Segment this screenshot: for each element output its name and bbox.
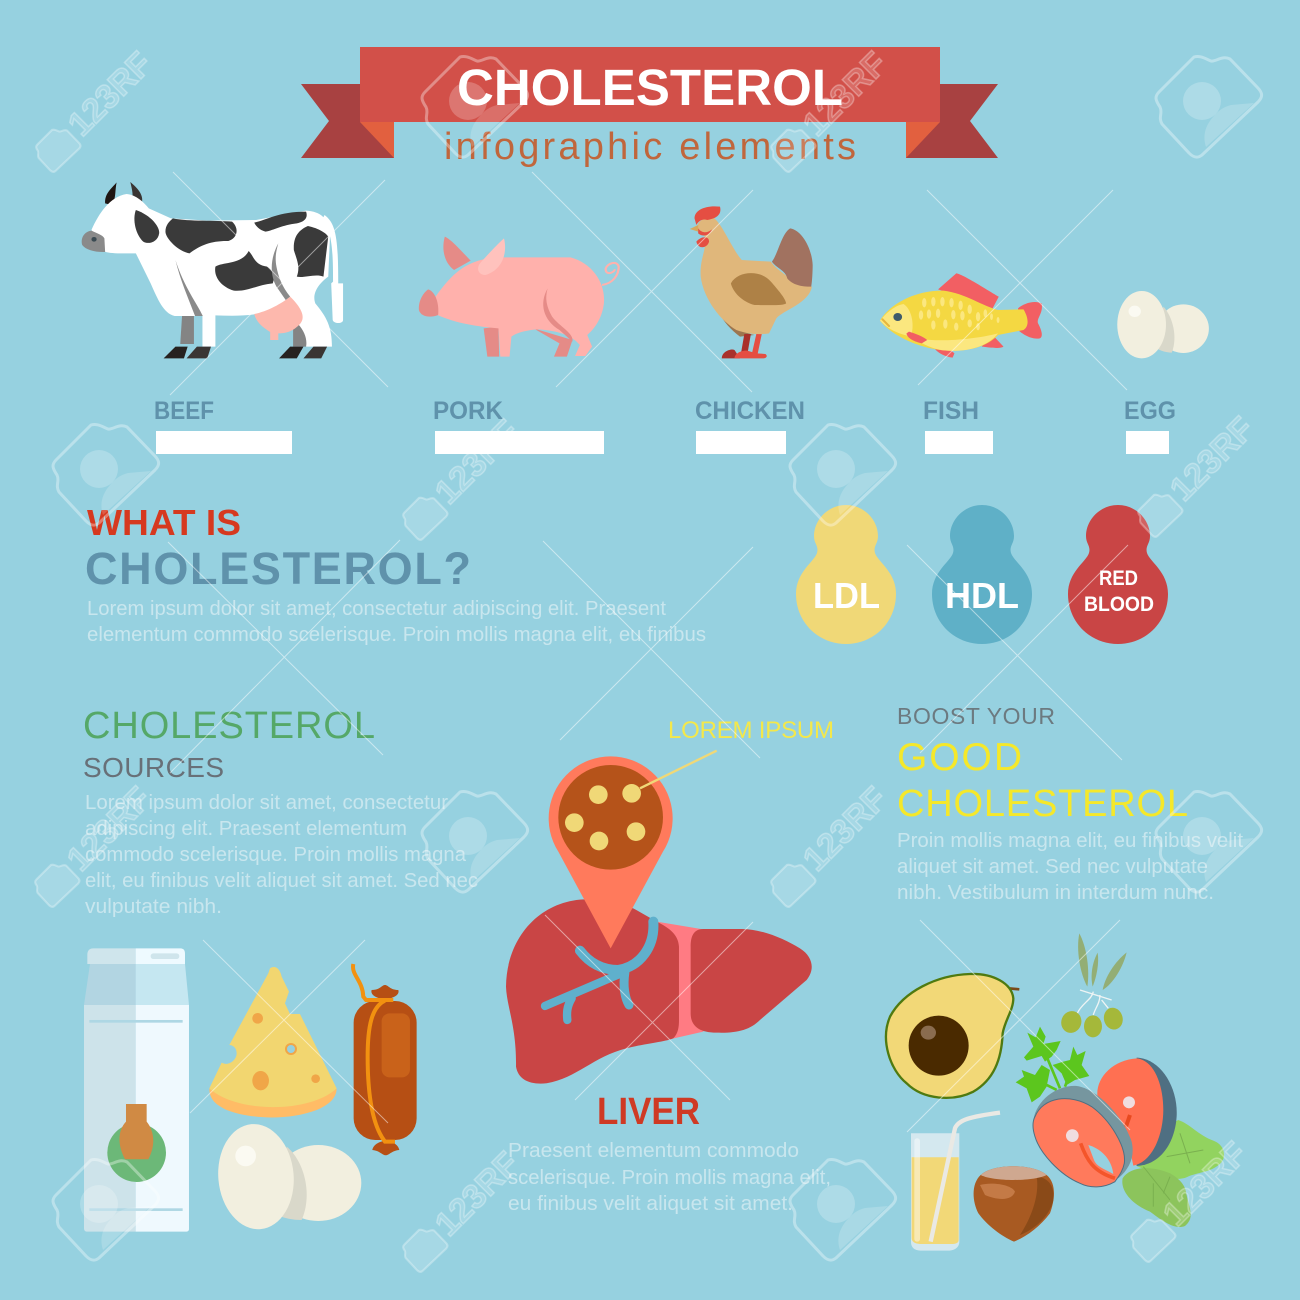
label: egg	[1124, 397, 1176, 454]
text block: sources: Lorem ipsum dolor sit amet, consectetur	[85, 791, 448, 814]
watermark: 123RF logos: 123RF	[796, 45, 895, 144]
icon: salmon steaks	[1033, 1058, 1177, 1187]
icon: map pin	[549, 751, 717, 948]
icon: cheese	[209, 967, 337, 1117]
icon: sausage	[353, 964, 417, 1155]
icon: avocado	[886, 974, 1019, 1098]
text block: good cholesterol: Proin mollis magna elit, eu finibus velit	[897, 829, 1243, 852]
watermark: 123RF logos: 123RF	[796, 780, 895, 879]
subtitle: infographic elements	[444, 126, 856, 168]
label: fish	[923, 397, 993, 454]
icon: pig	[419, 237, 619, 357]
watermark: 123RF logos: 123RF	[1163, 410, 1262, 509]
label: chicken	[695, 397, 805, 454]
icon: hazelnut	[974, 1166, 1054, 1242]
title ribbon	[301, 47, 998, 158]
heading: cholesterol sources: CHOLESTEROL	[83, 705, 375, 747]
label: chicken: CHICKEN	[695, 397, 805, 425]
label: beef	[154, 397, 292, 454]
callout: lorem ipsum: LOREM IPSUM	[668, 717, 834, 744]
drop: red blood	[1068, 505, 1168, 644]
heading: what is cholesterol: CHOLESTEROL?	[85, 543, 471, 594]
heading: cholesterol sources	[83, 705, 375, 783]
text block: sources: vulputate nibh.	[85, 895, 222, 918]
icon: lettuce	[1122, 1120, 1224, 1227]
text block: sources: adipiscing elit. Praesent elementum	[85, 817, 407, 840]
label: egg: EGG	[1124, 397, 1176, 425]
heading: what is cholesterol: WHAT IS	[87, 502, 241, 543]
text block: good cholesterol: aliquet sit amet. Sed nec vulputate	[897, 855, 1208, 878]
icon: chicken	[690, 206, 813, 358]
watermark: 123RF logos: 123RF	[61, 45, 160, 144]
heading: boost good cholesterol: GOOD	[897, 736, 1022, 779]
text block: liver: scelerisque. Proin mollis magna elit,	[508, 1166, 831, 1189]
label: beef: BEEF	[154, 397, 214, 425]
icon: parsley	[1016, 1027, 1089, 1102]
watermark: 123RF logos: 123RF	[1156, 1135, 1255, 1234]
text block: what is cholesterol	[87, 597, 706, 646]
drop: red blood: BLOOD	[1084, 593, 1154, 616]
icon: olives	[1058, 933, 1127, 1037]
heading: boost good cholesterol: CHOLESTEROL	[897, 783, 1188, 825]
label: fish: FISH	[923, 397, 979, 425]
watermark: 123RF logos: 123RF	[428, 1145, 527, 1244]
heading: liver: LIVER	[597, 1091, 700, 1133]
icon: juice glass	[911, 1113, 1000, 1251]
drop: LDL	[796, 505, 896, 644]
icon: eggs large	[214, 1121, 361, 1232]
text block: good cholesterol: nibh. Vestibulum in interdum nunc.	[897, 881, 1214, 904]
drop: red blood: RED	[1099, 567, 1138, 590]
watermark: 123RF logos: 123RF	[60, 780, 159, 879]
label: pork	[433, 397, 604, 454]
heading: cholesterol sources: SOURCES	[83, 752, 224, 783]
heading: boost good cholesterol	[897, 703, 1188, 825]
watermark: 123RF logos: 123RF	[428, 413, 527, 512]
title: CHOLESTEROL	[457, 59, 843, 116]
text block: sources: elit, eu finibus velit aliquet sit amet. Sed nec	[85, 869, 478, 892]
heading: what is cholesterol	[85, 502, 471, 594]
drop: HDL	[932, 505, 1032, 644]
icon: liver	[506, 899, 812, 1084]
icon: fish	[880, 273, 1042, 358]
icon: milk carton	[84, 948, 189, 1232]
text block: what is cholesterol: Lorem ipsum dolor sit amet, consectetur adipiscing elit. Praesent	[87, 597, 666, 620]
icon: eggs	[1117, 291, 1209, 358]
text block: sources	[85, 791, 478, 918]
text block: sources: commodo scelerisque. Proin mollis magna	[85, 843, 467, 866]
drop: HDL: HDL	[945, 575, 1019, 616]
label: pork: PORK	[433, 397, 503, 425]
text block: liver: eu finibus velit aliquet sit amet.	[508, 1192, 793, 1215]
text block: liver: Praesent elementum commodo	[508, 1139, 799, 1162]
text block: good cholesterol	[897, 829, 1243, 904]
drop: LDL: LDL	[813, 575, 880, 616]
watermark: diagonal lines	[168, 172, 1130, 1132]
text block: liver	[508, 1139, 831, 1215]
icon: cow	[82, 182, 343, 358]
heading: boost good cholesterol: BOOST YOUR	[897, 703, 1055, 729]
text block: what is cholesterol: elementum commodo scelerisque. Proin mollis magna elit, eu finibus	[87, 623, 706, 646]
